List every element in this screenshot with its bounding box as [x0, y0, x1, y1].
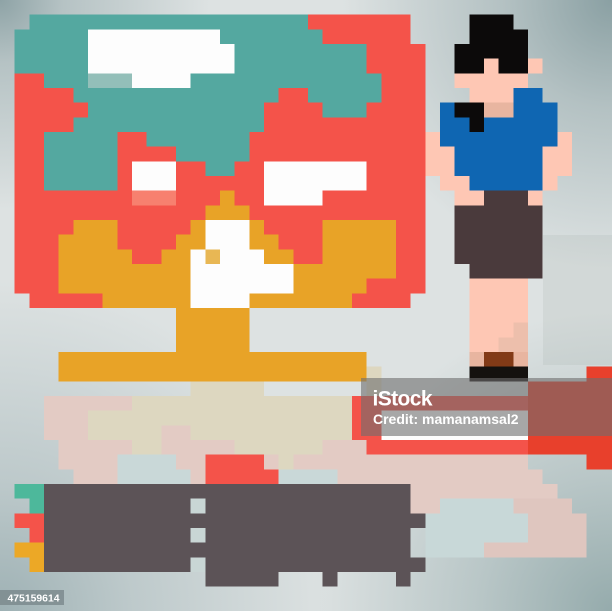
orange tab — [15, 543, 44, 572]
watermark logo: iStock — [372, 388, 433, 410]
black bow tie — [455, 103, 484, 132]
red block above keyboard — [205, 455, 279, 484]
monitor red body — [15, 15, 425, 308]
keyboard body — [44, 484, 425, 587]
teal tab — [15, 484, 44, 513]
orange base shape — [59, 191, 396, 308]
image id box: 475159614 — [8, 594, 60, 604]
dark skirt — [455, 191, 543, 279]
blue shirt — [440, 88, 557, 191]
teal screen shape — [15, 15, 381, 191]
white highlights — [88, 29, 367, 205]
pale reflection of computer — [44, 367, 587, 557]
leg shading and shoes — [469, 323, 528, 381]
image id box — [0, 590, 64, 605]
black hair — [455, 15, 528, 73]
watermark credit: Credit: mamanamsal2 — [373, 411, 519, 427]
keyboard dark panel — [15, 455, 425, 587]
skin: head, arms, legs — [425, 59, 572, 352]
computer monitor — [15, 15, 425, 381]
red tab — [15, 513, 44, 543]
watermark band — [361, 378, 612, 436]
monitor stand — [59, 308, 367, 381]
white glare on base — [191, 220, 293, 308]
person — [425, 15, 572, 381]
red and white bar at right — [352, 367, 612, 469]
keyboard holes — [191, 499, 205, 572]
